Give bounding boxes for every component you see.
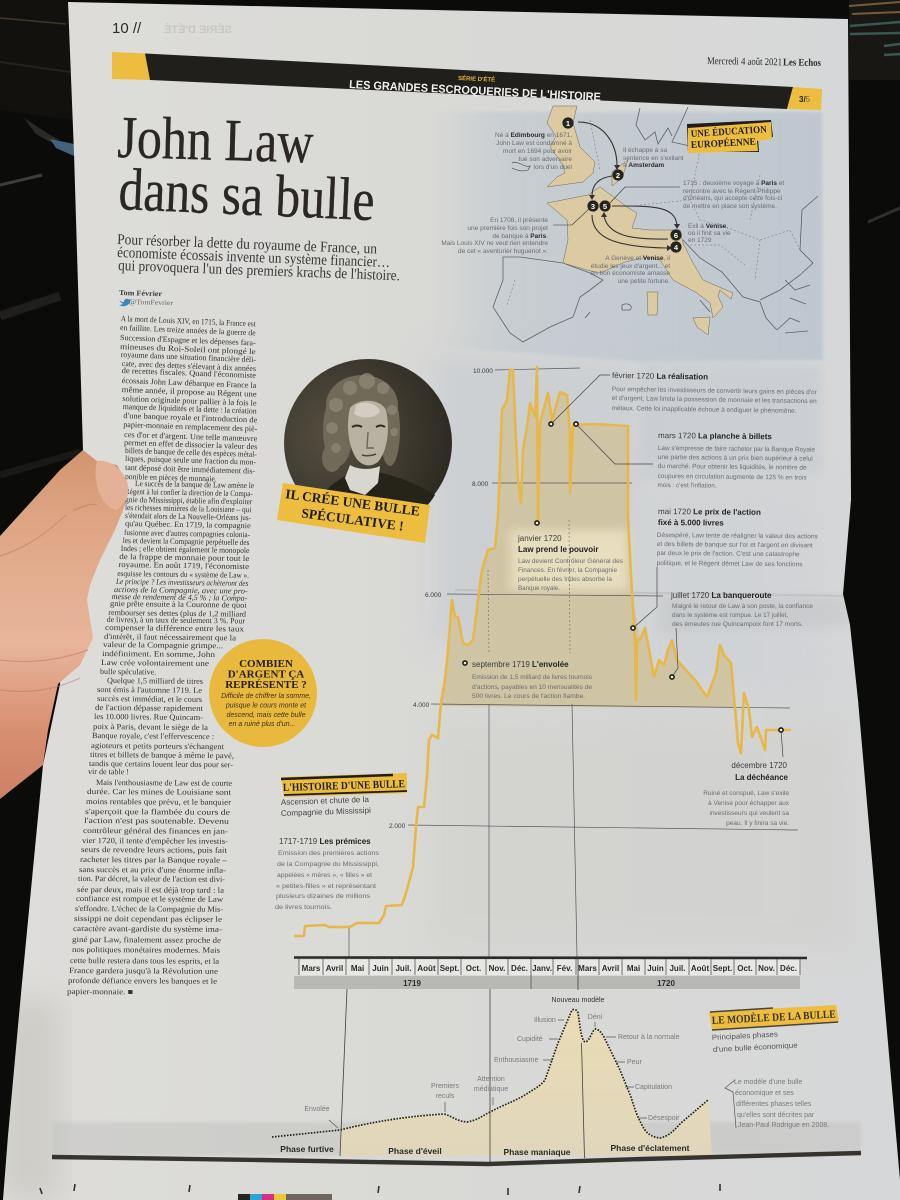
annotation: mai 1720 bbox=[657, 507, 819, 568]
callout circle: combien d'argent: Difficile de chiffrer la somme, bbox=[221, 693, 311, 700]
annotation: septembre 1719: septembre 1719 L'envolée bbox=[472, 660, 569, 669]
chart heading bbox=[281, 773, 407, 818]
annotation: 1717-1719: « petites-filles » et représentant bbox=[276, 883, 376, 890]
article body text: d'une banque royale et l'introduction de bbox=[123, 411, 258, 424]
article body text: billets de banque de celle des espèces métal- bbox=[125, 446, 257, 459]
map captions: mort en 1694 pour avoir bbox=[503, 148, 573, 155]
annotation: mai 1720: Désespéré, Law tente de réaligner la valeur des actions bbox=[657, 532, 819, 540]
model heading: d'une bulle économique bbox=[713, 1041, 798, 1054]
phase dividers bbox=[340, 957, 584, 1162]
printer colour bar bbox=[238, 1194, 332, 1200]
annotation: 1717-1719: 1717-1719 Les prémices bbox=[279, 837, 371, 846]
annotation: 1717-1719 bbox=[275, 837, 380, 911]
map captions: Il échappe à sa bbox=[623, 147, 667, 154]
map captions: A Genève et Venise, il bbox=[605, 255, 671, 262]
event markers bbox=[463, 422, 783, 732]
article body text: sans succès et au prix d'une énorme infla- bbox=[79, 865, 226, 875]
header band bbox=[112, 52, 822, 110]
phase stage labels bbox=[304, 997, 680, 1122]
article body text: vier 1720, il tente d'empêcher les investis- bbox=[82, 836, 228, 846]
map captions: Exil à Venise, bbox=[688, 223, 728, 230]
phase stage labels: Déni bbox=[588, 1014, 603, 1021]
phase stage labels: Cupidité bbox=[517, 1036, 543, 1043]
portrait of John Law bbox=[284, 359, 452, 530]
article body text: poix à Paris, devant le siège de la bbox=[93, 722, 209, 732]
article body text: s'effondre. L'échec de la Compagnie du Mis- bbox=[75, 904, 223, 914]
article body text: ponible en pièces de monnaie. bbox=[125, 472, 217, 483]
annotation: février 1720: Pour empêcher les investisseurs de convertir leurs gains en pièces d'or bbox=[612, 386, 818, 396]
map captions: de cet « aventurier huguenot ». bbox=[458, 248, 548, 255]
annotation: janvier 1720 bbox=[517, 534, 624, 592]
callout circle: combien d'argent: en a ruiné plus d'un... bbox=[229, 721, 295, 728]
model note: différentes phases telles bbox=[736, 1101, 812, 1108]
article body text: gnie du Mississippi, établie afin d'exploiter bbox=[125, 495, 253, 506]
article body text: mineuses du Roi-Soleil ont plongé le bbox=[120, 342, 256, 356]
article body text: succès est immédiat, et le cours bbox=[97, 694, 202, 704]
cravat bbox=[345, 465, 380, 495]
article body text: esquisse les contours du « système de Law ». bbox=[117, 569, 249, 580]
face bbox=[348, 401, 388, 465]
article body text: sont émis à l'automne 1719. Le bbox=[97, 685, 203, 695]
map captions: rencontre avec le Régent Philippe bbox=[683, 188, 781, 195]
article body text: cette bulle restera dans tous les esprits, et la bbox=[70, 956, 220, 966]
numbered markers: 6 bbox=[674, 231, 678, 240]
show-through mirrored text: SÉRIE D'ÉTÉ bbox=[164, 23, 232, 36]
article body text: Banque royale, c'est l'effervescence : bbox=[92, 731, 214, 741]
month labels: Août bbox=[417, 964, 436, 973]
month labels: Août bbox=[691, 964, 709, 973]
article body text: royaume. En août 1719, l'économiste bbox=[118, 560, 250, 571]
month labels: Déc. bbox=[780, 964, 797, 973]
annotation: janvier 1720: Law prend le pouvoir bbox=[518, 545, 598, 554]
article body text: les richesses minières de la Louisiane – qui bbox=[125, 503, 252, 514]
article body text: papier-monnaie en remplacement des piè- bbox=[123, 420, 258, 433]
date and masthead: Les Echos bbox=[783, 57, 821, 69]
phase stage labels: Enthousiasme bbox=[494, 1057, 538, 1064]
annotation: mars 1720: coupures en circulation augmente de 125 % en trois bbox=[658, 473, 807, 482]
map captions: Né à Edimbourg en 1671, bbox=[495, 132, 572, 139]
dotted curve bbox=[272, 1009, 708, 1138]
annotation: mars 1720 bbox=[657, 431, 815, 491]
year labels: 1719 bbox=[403, 979, 421, 988]
phase stage labels: reculs bbox=[436, 1093, 455, 1100]
month labels: Mars bbox=[302, 964, 321, 973]
month labels: Fév. bbox=[557, 964, 572, 973]
article body text: caractère avant-gardiste du système ima- bbox=[73, 924, 222, 934]
tick lines bbox=[329, 1020, 647, 1128]
article body text: Régent à lui confier la direction de la Compa- bbox=[125, 487, 253, 498]
bottom rule bbox=[52, 1153, 861, 1164]
annotation: février 1720: et d'argent, Law limite la possession de monnaie et les transactions en bbox=[612, 395, 817, 405]
month labels: Avril bbox=[602, 964, 619, 973]
byline bbox=[119, 288, 174, 307]
article body text bbox=[67, 314, 258, 996]
callout circle: combien d'argent: REPRÉSENTE ? bbox=[225, 679, 307, 691]
month labels: Mai bbox=[351, 964, 364, 973]
map captions: en bon économiste amasse bbox=[590, 270, 670, 277]
phase stage labels: Attention bbox=[477, 1076, 505, 1083]
article body text: sissippi ne doit cependant pas éclipser le bbox=[74, 914, 223, 924]
y axis values: 4.000 bbox=[413, 702, 430, 709]
article body text: ces d'or et d'argent. Une telle manœuvre bbox=[124, 430, 258, 443]
article body text: Le succès de la banque de Law amène le bbox=[135, 479, 255, 490]
article body text: moins rentables que prévu, et le banquier bbox=[86, 797, 231, 807]
phase names: Phase d'éclatement bbox=[610, 1143, 690, 1153]
annotation: 1717-1719: plusieurs dizaines de millions bbox=[276, 893, 371, 900]
month labels: Oct. bbox=[466, 964, 481, 973]
annotation: juillet 1720: dans le système est rompue. Le 17 juillet, bbox=[672, 612, 788, 619]
numbered markers: 2 bbox=[616, 171, 620, 180]
annotation: juillet 1720: juillet 1720 La banqueroute bbox=[670, 591, 772, 600]
annotation: mars 1720: Law s'empresse de faire racheter par la Banque Royale bbox=[658, 445, 815, 454]
article body text: messe de rendement de 4,5 % ; la Compa- bbox=[112, 592, 248, 603]
phase stage labels: Illusion bbox=[534, 1017, 556, 1024]
annotation: décembre 1720: investisseurs qui veulent sa bbox=[710, 810, 789, 817]
model note: Jean-Paul Rodrigue en 2008. bbox=[738, 1122, 829, 1129]
photo: hand holding the newspaper bbox=[0, 450, 128, 799]
article body text: A la mort de Louis XIV, en 1715, la France est bbox=[121, 314, 257, 328]
annotation: mai 1720: par deux le prix de l'action. C'est une catastrophe bbox=[657, 550, 800, 558]
numbered markers bbox=[562, 117, 682, 253]
callout circle: combien d'argent: COMBIEN bbox=[239, 658, 293, 670]
printer marks bbox=[40, 1184, 720, 1195]
article body text: écossais John Law débarque en France la bbox=[122, 376, 257, 390]
subtitle: Pour résorber la dette du royaume de France, un bbox=[117, 232, 378, 258]
month labels: Juin bbox=[372, 964, 389, 973]
title: John Law bbox=[117, 104, 315, 175]
article body text: confiance est rompue et le système de Law bbox=[76, 894, 223, 904]
article body text: Mais l'enthousiasme de Law est de courte bbox=[96, 778, 232, 788]
annotation: décembre 1720: La déchéance bbox=[735, 773, 789, 782]
y axis values: 10.000 bbox=[473, 368, 493, 375]
map captions: en 1729 bbox=[688, 237, 712, 244]
numbered markers: 5 bbox=[603, 202, 607, 211]
annotation: septembre 1719: 500 livres. Le cours de l'action flambe. bbox=[472, 693, 585, 700]
article body text: sée par deux, mais il est déjà trop tard : la bbox=[77, 885, 225, 895]
annotation: septembre 1719: d'actions, payables en 10 mensualités de bbox=[472, 684, 592, 691]
annotation: mars 1720: mars 1720 La planche à billets bbox=[658, 431, 772, 441]
annotation: 1717-1719: de livres tournois. bbox=[275, 904, 332, 911]
article body text: vir de table ! bbox=[88, 767, 129, 776]
phase stage labels: Peur bbox=[627, 1059, 642, 1066]
article body text: tion. Par décret, la valeur de l'action est divi- bbox=[78, 874, 225, 884]
phase names: Phase furtive bbox=[280, 1144, 334, 1154]
callout banner: il crée une bulle spéculative: IL CRÉE UNE BULLE bbox=[284, 486, 421, 519]
annotation: décembre 1720: décembre 1720 bbox=[731, 761, 788, 770]
article body text: profonde défiance envers les banques et le bbox=[68, 976, 218, 986]
article body text: bulle spéculative. bbox=[100, 667, 156, 676]
grid lines bbox=[349, 368, 798, 957]
annotation: décembre 1720: à Venise pour échapper aux bbox=[708, 800, 790, 807]
article body text: les et devient la Compagnie perpétuelle des bbox=[123, 536, 249, 547]
article body text: Le principe ? Les investisseurs achèteront des bbox=[115, 577, 248, 588]
phase names: Phase d'éveil bbox=[388, 1146, 442, 1156]
month labels: Sept. bbox=[713, 964, 732, 973]
article body text: de livres), à un taux de seulement 3 %. Pour bbox=[107, 615, 245, 625]
month labels: Mai bbox=[627, 964, 640, 973]
map captions: 1715 : deuxième voyage à Paris et bbox=[683, 180, 784, 187]
annotation: juillet 1720: Malgré le retour de Law à son poste, la confiance bbox=[672, 603, 813, 610]
article body text: de la frappe de monnaie pour tout le bbox=[119, 552, 250, 563]
annotation: janvier 1720: perpétuelle des Indes absorbe la bbox=[518, 576, 612, 583]
map heading bbox=[687, 120, 773, 153]
map captions: En 1708, il présente bbox=[490, 217, 548, 224]
annotation: juillet 1720: des émeutes rue Quincampoix font 17 morts. bbox=[672, 621, 803, 628]
map captions: où il finit sa vie bbox=[688, 230, 731, 237]
article body text: giné par Law, finalement assez proche de bbox=[72, 935, 222, 945]
connector lines bbox=[551, 375, 783, 757]
dashed borders bbox=[507, 120, 800, 305]
annotation: janvier 1720: Banque royale. bbox=[518, 585, 560, 592]
article body text: royaume dans une situation financière déli- bbox=[121, 350, 256, 364]
article body text: agioteurs et petits porteurs s'échangent bbox=[91, 741, 225, 751]
article body text: même année, il propose au Régent une bbox=[122, 385, 257, 399]
annotation: mars 1720: du marché. Pour obtenir les liquidités, le nombre de bbox=[658, 463, 807, 472]
phase names: Phase maniaque bbox=[503, 1147, 571, 1157]
article body text: d'intérêt, il faut nécessairement que la bbox=[104, 632, 237, 642]
model heading: LE MODÈLE DE LA BULLE bbox=[712, 1009, 836, 1027]
article body text: nos politiques monétaires modernes. Mais bbox=[72, 945, 220, 955]
annotation: 1717-1719: de la Compagnie du Mississippi, bbox=[277, 861, 379, 868]
map heading: EUROPÉENNE bbox=[691, 136, 756, 151]
annotation: juillet 1720 bbox=[670, 591, 813, 628]
article body text: valeur de la Compagnie grimpe... bbox=[103, 640, 223, 650]
annotation: janvier 1720: Finances. En février, la Compagnie bbox=[518, 567, 617, 574]
annotation: septembre 1719: Emission de 1,5 milliard de livres tournois bbox=[472, 674, 593, 681]
article body text: cate, avec des dettes s'élevant à dix années bbox=[122, 359, 256, 373]
map captions: une petite fortune. bbox=[618, 278, 670, 285]
numbered markers: 1 bbox=[566, 119, 570, 128]
year labels bbox=[403, 979, 675, 988]
year labels: 1720 bbox=[657, 979, 675, 988]
month labels: Juin bbox=[647, 964, 664, 973]
model note bbox=[725, 1079, 829, 1129]
annotation: décembre 1720: Ruiné et conspué, Law s'exile bbox=[703, 790, 789, 797]
annotation: 1717-1719: Emission des premières actions bbox=[278, 850, 380, 857]
month labels: Déc. bbox=[511, 964, 528, 973]
numbered markers: 3 bbox=[591, 202, 595, 211]
map captions: lors d'un duel bbox=[534, 164, 573, 171]
route arrows bbox=[553, 122, 680, 248]
article body text: durée. Car les mines de Louisiane sont bbox=[87, 787, 232, 797]
subtitle: économiste écossais invente un système financier… bbox=[117, 245, 390, 271]
month labels: Juil. bbox=[669, 964, 686, 973]
title bbox=[117, 104, 376, 233]
y axis values bbox=[389, 368, 493, 830]
map captions: de mettre en place son système. bbox=[683, 203, 777, 210]
phase stage labels: Retour à la normale bbox=[618, 1034, 680, 1041]
callout circle: combien d'argent bbox=[209, 639, 317, 747]
article body text: tandis que certains louent leur dos pour ser- bbox=[89, 759, 233, 769]
annotation: mars 1720: mois : c'est l'inflation. bbox=[657, 482, 717, 490]
article body text: indéfiniment. En somme, John bbox=[102, 649, 215, 659]
month labels: Nov. bbox=[758, 964, 775, 973]
article body text: en faillite. Les treize années de la guerre de bbox=[120, 323, 256, 337]
phase stage labels: Envolée bbox=[304, 1106, 330, 1113]
article body text: Succession d'Espagne et les dépenses fara- bbox=[120, 333, 256, 347]
chart: share price bbox=[275, 367, 819, 957]
callout circle: combien d'argent: descend, mais cette bulle bbox=[226, 712, 306, 719]
phase stage labels: médiatique bbox=[474, 1086, 508, 1093]
chart heading: Ascension et chute de la bbox=[281, 795, 370, 807]
date and masthead: Mercredi 4 août 2021 bbox=[707, 56, 782, 68]
article body text: compenser la différence entre les taux bbox=[105, 623, 244, 633]
phase names bbox=[280, 1143, 690, 1157]
map captions: sentence en s'exilant bbox=[623, 155, 684, 162]
chart heading: L'HISTOIRE D'UNE BULLE bbox=[283, 778, 405, 794]
month labels: Juil. bbox=[395, 964, 412, 973]
month labels: Nov. bbox=[489, 964, 505, 973]
annotation: mars 1720: une partie des actions à un prix bien supérieur à celui bbox=[658, 454, 813, 463]
month labels bbox=[302, 964, 797, 973]
bubble model chart bbox=[272, 957, 839, 1162]
annotation: décembre 1720: peau. Il y finira sa vie. bbox=[726, 820, 789, 827]
timeline bbox=[294, 958, 807, 989]
article body text: France gardera jusqu'à la Révolution une bbox=[69, 966, 219, 976]
model note: qu'elles sont décrites par bbox=[737, 1112, 815, 1119]
article body text: racheter les titres par la Banque royale – bbox=[80, 855, 228, 865]
byline: @TomFevrier bbox=[129, 298, 174, 307]
article body text: permet en effet de dissocier la valeur des bbox=[124, 438, 257, 451]
bubble fill bbox=[340, 1010, 712, 1156]
annotation: mai 1720: politique, et le Régent démet Law de ses fonctions bbox=[657, 560, 803, 568]
article body text: l'action n'est pas soutenable. Devenu bbox=[84, 816, 229, 826]
month labels: Janv. bbox=[532, 964, 552, 973]
article body text: rembourser ses dettes (plus de 1,2 milliard bbox=[108, 608, 246, 619]
model heading bbox=[709, 1005, 839, 1054]
fill under price curve bbox=[441, 367, 735, 708]
map captions: d'Orléans, qui accepte cette fois-ci bbox=[683, 195, 782, 202]
article body text: liques, puisque seule une fraction du mon- bbox=[125, 454, 256, 467]
annotation: 1717-1719: appelées « mères », « filles » et bbox=[277, 872, 372, 879]
map captions: une première fois son projet bbox=[467, 225, 548, 232]
map outlines bbox=[493, 107, 818, 342]
y axis values: 6.000 bbox=[425, 592, 442, 599]
article body text: gnie prête ensuite à la Couronne de quoi bbox=[110, 599, 248, 610]
annotation: février 1720 bbox=[611, 371, 818, 415]
header band: SÉRIE D'ÉTÉ bbox=[458, 74, 495, 84]
article body text: Law crée volontairement une bbox=[101, 658, 210, 668]
phase stage labels: Désespoir bbox=[648, 1115, 680, 1122]
phase stage labels: Capitulation bbox=[635, 1084, 672, 1091]
article body text: tant déposé doit être immédiatement dis- bbox=[125, 463, 255, 476]
title: dans sa bulle bbox=[117, 156, 376, 233]
map heading: UNE ÉDUCATION bbox=[690, 123, 768, 140]
article body text: s'étendait alors de La Nouvelle-Orléans jus- bbox=[125, 511, 251, 522]
article body text: contrôleur général des finances en jan- bbox=[83, 826, 228, 836]
page number: 10 // bbox=[112, 20, 142, 37]
map captions: à Amsterdam bbox=[623, 162, 664, 169]
y axis values: 2.000 bbox=[389, 823, 406, 830]
chart heading: Compagnie du Mississipi bbox=[281, 806, 371, 818]
map: une éducation européenne bbox=[441, 106, 818, 342]
price curve bbox=[294, 367, 791, 936]
article body text: seurs de revendre leurs actions, puis fait bbox=[81, 845, 228, 855]
wig bbox=[322, 375, 400, 472]
map captions: de banque à Paris. bbox=[492, 233, 548, 240]
map captions bbox=[441, 132, 784, 285]
annotation: mai 1720: mai 1720 Le prix de l'action bbox=[658, 507, 761, 517]
map captions: John Law est condamné à bbox=[496, 140, 572, 147]
article body text: Quelque 1,5 milliard de titres bbox=[107, 676, 203, 686]
map captions: tué son adversaire bbox=[519, 156, 572, 163]
article body text: les 10.000 livres. Rue Quincam- bbox=[94, 712, 203, 722]
phase stage labels: Nouveau modèle bbox=[552, 997, 605, 1004]
model note: économique et ses bbox=[735, 1090, 794, 1097]
article body text: titres et billets de banque à même le pavé, bbox=[90, 750, 234, 760]
model heading: Principales phases bbox=[712, 1030, 778, 1042]
article body text: qu'au Québec. En 1719, la compagnie bbox=[125, 519, 251, 530]
byline: Tom Février bbox=[119, 288, 163, 298]
header band: LES GRANDES ESCROQUERIES DE L'HISTOIRE bbox=[349, 79, 601, 104]
month labels: Oct. bbox=[737, 964, 753, 973]
month labels: Mars bbox=[578, 964, 597, 973]
callout banner: il crée une bulle spéculative: SPÉCULATIVE ! bbox=[301, 505, 405, 534]
annotation: février 1720: métaux. Cette loi inapplicable échoue à endiguer le phénomène. bbox=[611, 405, 797, 415]
header band: 3/5 bbox=[799, 95, 811, 104]
annotation: janvier 1720: janvier 1720 bbox=[517, 534, 562, 543]
article body text: papier-monnaie. ■ bbox=[67, 987, 133, 996]
phase stage labels: Premiers bbox=[431, 1083, 459, 1090]
land in tan bbox=[547, 106, 733, 335]
callout circle: combien d'argent: puisque le cours monte et bbox=[225, 702, 307, 710]
article body text: Indes ; elle obtient également le monopole bbox=[121, 544, 250, 555]
month labels: Avril bbox=[326, 964, 343, 973]
article body text: manque de liquidités et la dette : la création bbox=[123, 402, 257, 416]
article body text: actions de la Compagnie, avec une pro- bbox=[114, 585, 248, 596]
y axis values: 8.000 bbox=[472, 481, 489, 488]
month labels: Sept. bbox=[440, 964, 459, 973]
annotation: mai 1720: fixé à 5.000 livres bbox=[658, 518, 724, 528]
subtitle: qui provoquera l'un des premiers krachs de l'histoire. bbox=[118, 258, 400, 284]
annotation: janvier 1720: Law devient Contrôleur Général des bbox=[518, 558, 624, 565]
article body text: solution originale pour pallier à la fois le bbox=[122, 394, 257, 408]
annotation: mai 1720: et des billets de banque sur l'or et l'argent en divisant bbox=[657, 541, 813, 549]
article body text: fusionne avec d'autres compagnies colonia- bbox=[124, 528, 250, 539]
callout circle: combien d'argent: D'ARGENT ÇA bbox=[228, 668, 304, 680]
numbered markers: 4 bbox=[674, 243, 679, 252]
map captions: Mais Louis XIV ne veut rien entendre bbox=[441, 240, 548, 247]
annotation: septembre 1719 bbox=[472, 660, 593, 700]
annotation: février 1720: février 1720 La réalisation bbox=[612, 371, 708, 382]
callout banner: il crée une bulle spéculative bbox=[277, 483, 430, 543]
subtitle bbox=[117, 232, 400, 284]
model note: Le modèle d'une bulle bbox=[734, 1079, 802, 1086]
article body text: de recettes fiscales. Quand l'économiste bbox=[122, 366, 257, 380]
article body text: s'aperçoit que la flambée du cours de bbox=[85, 807, 231, 817]
article body text: de l'action dépasse rapidement bbox=[95, 703, 204, 713]
map captions: étudie les jeux d'argent... et bbox=[591, 263, 670, 270]
annotation: décembre 1720 bbox=[703, 761, 790, 827]
